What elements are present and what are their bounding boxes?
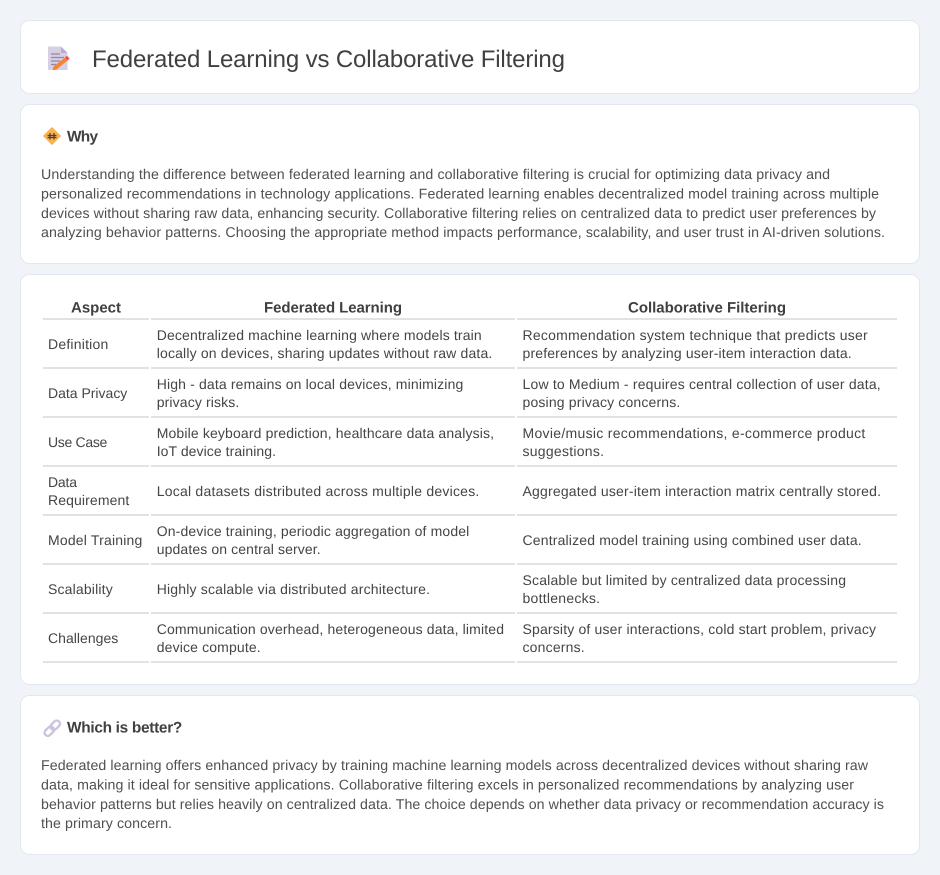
row: use case [43,425,897,467]
row: challenges: Sparsity of user interactions, cold start problem, privacy [522,621,876,637]
row: use case: Movie/music recommendations, e-commerce product [522,425,865,441]
panel: comparison table [20,274,920,684]
row: model training: Model Training [48,532,142,548]
row: model training: On-device training, periodic aggregation of model [157,523,469,539]
panel: why [20,104,920,264]
row: definition: preferences by analyzing user-item interaction data. [522,345,852,361]
text block: which is better: the primary concern. [41,816,172,832]
text block: which is better: behavior patterns but relies heavily on centralized data. The choice depends on whether data privacy or recommendation accuracy is [41,797,884,813]
row: data requirement: Requirement [48,492,129,508]
row: data requirement [43,474,897,516]
text block: why [41,167,885,241]
text block: which is better [41,758,884,832]
row: data privacy: Low to Medium - requires central collection of user data, [522,376,881,392]
text block: why: personalized recommendations in technology applications. Federated learning enables decentralized model training across multiple [41,186,879,202]
table header [43,300,897,320]
row: definition [43,327,897,369]
row: scalability: bottlenecks. [522,590,600,606]
row: data privacy: Data Privacy [48,385,127,401]
icon: link [43,719,61,737]
row: model training: Centralized model training using combined user data. [522,532,862,548]
table header: Federated Learning [264,300,402,317]
row: model training: updates on central server. [157,541,321,557]
row: data privacy [43,376,897,418]
title: Federated Learning vs Collaborative Filtering [92,46,565,73]
row: data privacy: High - data remains on local devices, minimizing [157,376,463,392]
table header: Collaborative Filtering [628,300,786,317]
icon: warning diamond [44,128,60,144]
row: use case: Use Case [48,434,108,450]
row: use case: IoT device training. [157,443,276,459]
row: use case: Mobile keyboard prediction, healthcare data analysis, [157,425,494,441]
row: data requirement: Aggregated user-item interaction matrix centrally stored. [522,483,881,499]
row: data privacy: privacy risks. [157,394,239,410]
row: scalability: Highly scalable via distributed architecture. [157,581,430,597]
row: model training [43,523,897,565]
icon: memo with pencil [48,46,70,70]
row: scalability: Scalability [48,581,113,597]
text block: why: analyzing behavior patterns. Choosing the appropriate method impacts performance, scalability, and user trust in AI-driven solutions. [41,225,885,241]
row: challenges: concerns. [522,639,585,655]
row: challenges: Challenges [48,630,118,646]
row: scalability [43,572,897,614]
text block: why: devices without sharing raw data, enhancing security. Collaborative filtering relies on centralized data to predict user preferences by [41,206,877,222]
table header: Aspect [71,300,121,317]
text block: which is better: data, making it ideal for sensitive applications. Collaborative filtering excels in personalized recommendations by analyzing user [41,777,854,793]
row: data requirement: Local datasets distributed across multiple devices. [157,483,479,499]
row: definition: locally on devices, sharing updates without raw data. [157,345,492,361]
panel: which is better [20,696,920,854]
row: challenges [43,621,897,663]
heading: which is better: Which is better? [67,720,182,737]
heading: why: Why [67,128,98,146]
row: definition: Recommendation system technique that predicts user [522,327,868,343]
text block: which is better: Federated learning offers enhanced privacy by training machine learning models across decentralized devices without sharing raw [41,758,869,774]
row: challenges: Communication overhead, heterogeneous data, limited [157,621,504,637]
row: scalability: Scalable but limited by centralized data processing [522,572,846,588]
row: definition: Definition [48,336,108,352]
row: definition: Decentralized machine learning where models train [157,327,482,343]
row: data privacy: posing privacy concerns. [522,394,680,410]
text block: why: Understanding the difference between federated learning and collaborative filtering is crucial for optimizing data privacy and [41,167,830,183]
row: use case: suggestions. [522,443,604,459]
panel: header [20,20,920,94]
row: data requirement: Data [48,474,77,490]
row: challenges: device compute. [157,639,261,655]
